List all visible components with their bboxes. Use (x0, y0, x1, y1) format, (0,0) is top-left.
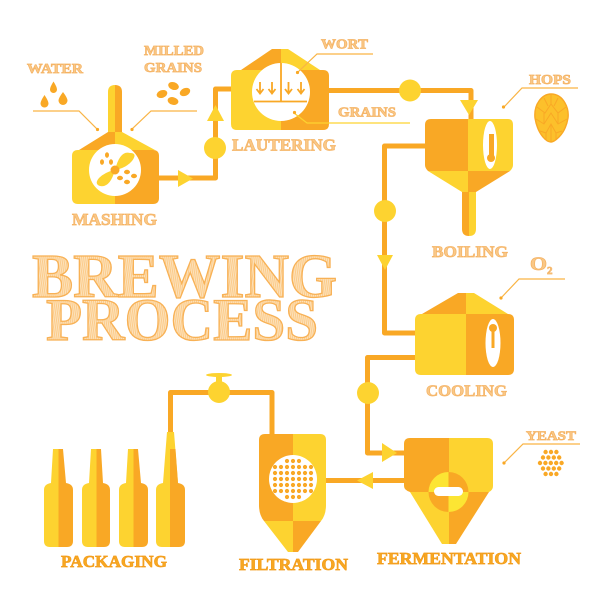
title: PROCESS (46, 287, 318, 353)
callout: wort (296, 38, 373, 74)
callout: water (27, 62, 99, 131)
bottle group: packaging (44, 432, 185, 547)
title: BREWING (32, 243, 337, 311)
callout: hops (502, 73, 578, 142)
callout: hops: HOPS (529, 73, 571, 88)
callout: oxygen: O (530, 254, 547, 275)
callout: water: WATER (27, 62, 84, 77)
callout: oxygen (499, 254, 565, 300)
panel: boiling kettle (425, 119, 513, 236)
panel: lautering tank (231, 49, 329, 130)
panel: filtration tank (259, 434, 326, 552)
callout: yeast (502, 428, 580, 474)
valves and arrows on pipes (178, 80, 478, 489)
callout: grains (293, 106, 410, 123)
callout: oxygen: 2 (547, 265, 553, 277)
label: boiling: BOILING (432, 244, 509, 261)
panel: mashing tank (72, 85, 159, 204)
callout: yeast: YEAST (526, 428, 576, 443)
label: fermentation: FERMENTATION (377, 549, 522, 568)
label: mashing: MASHING (72, 210, 157, 229)
panel: fermentation tank (404, 438, 493, 544)
label: cooling: COOLING (426, 383, 508, 400)
title (32, 243, 337, 353)
panel: cooling tank (415, 293, 514, 375)
label: lautering: LAUTERING (232, 136, 336, 154)
callout: milled grains (130, 44, 204, 131)
callout: wort: WORT (321, 38, 369, 52)
callout: grains: GRAINS (338, 106, 396, 120)
callout: milled grains: GRAINS (144, 61, 202, 76)
callout: milled grains: MILLED (144, 44, 204, 59)
label: packaging: PACKAGING (61, 552, 167, 571)
label: filtration: FILTRATION (239, 555, 349, 574)
pipes (159, 89, 471, 480)
